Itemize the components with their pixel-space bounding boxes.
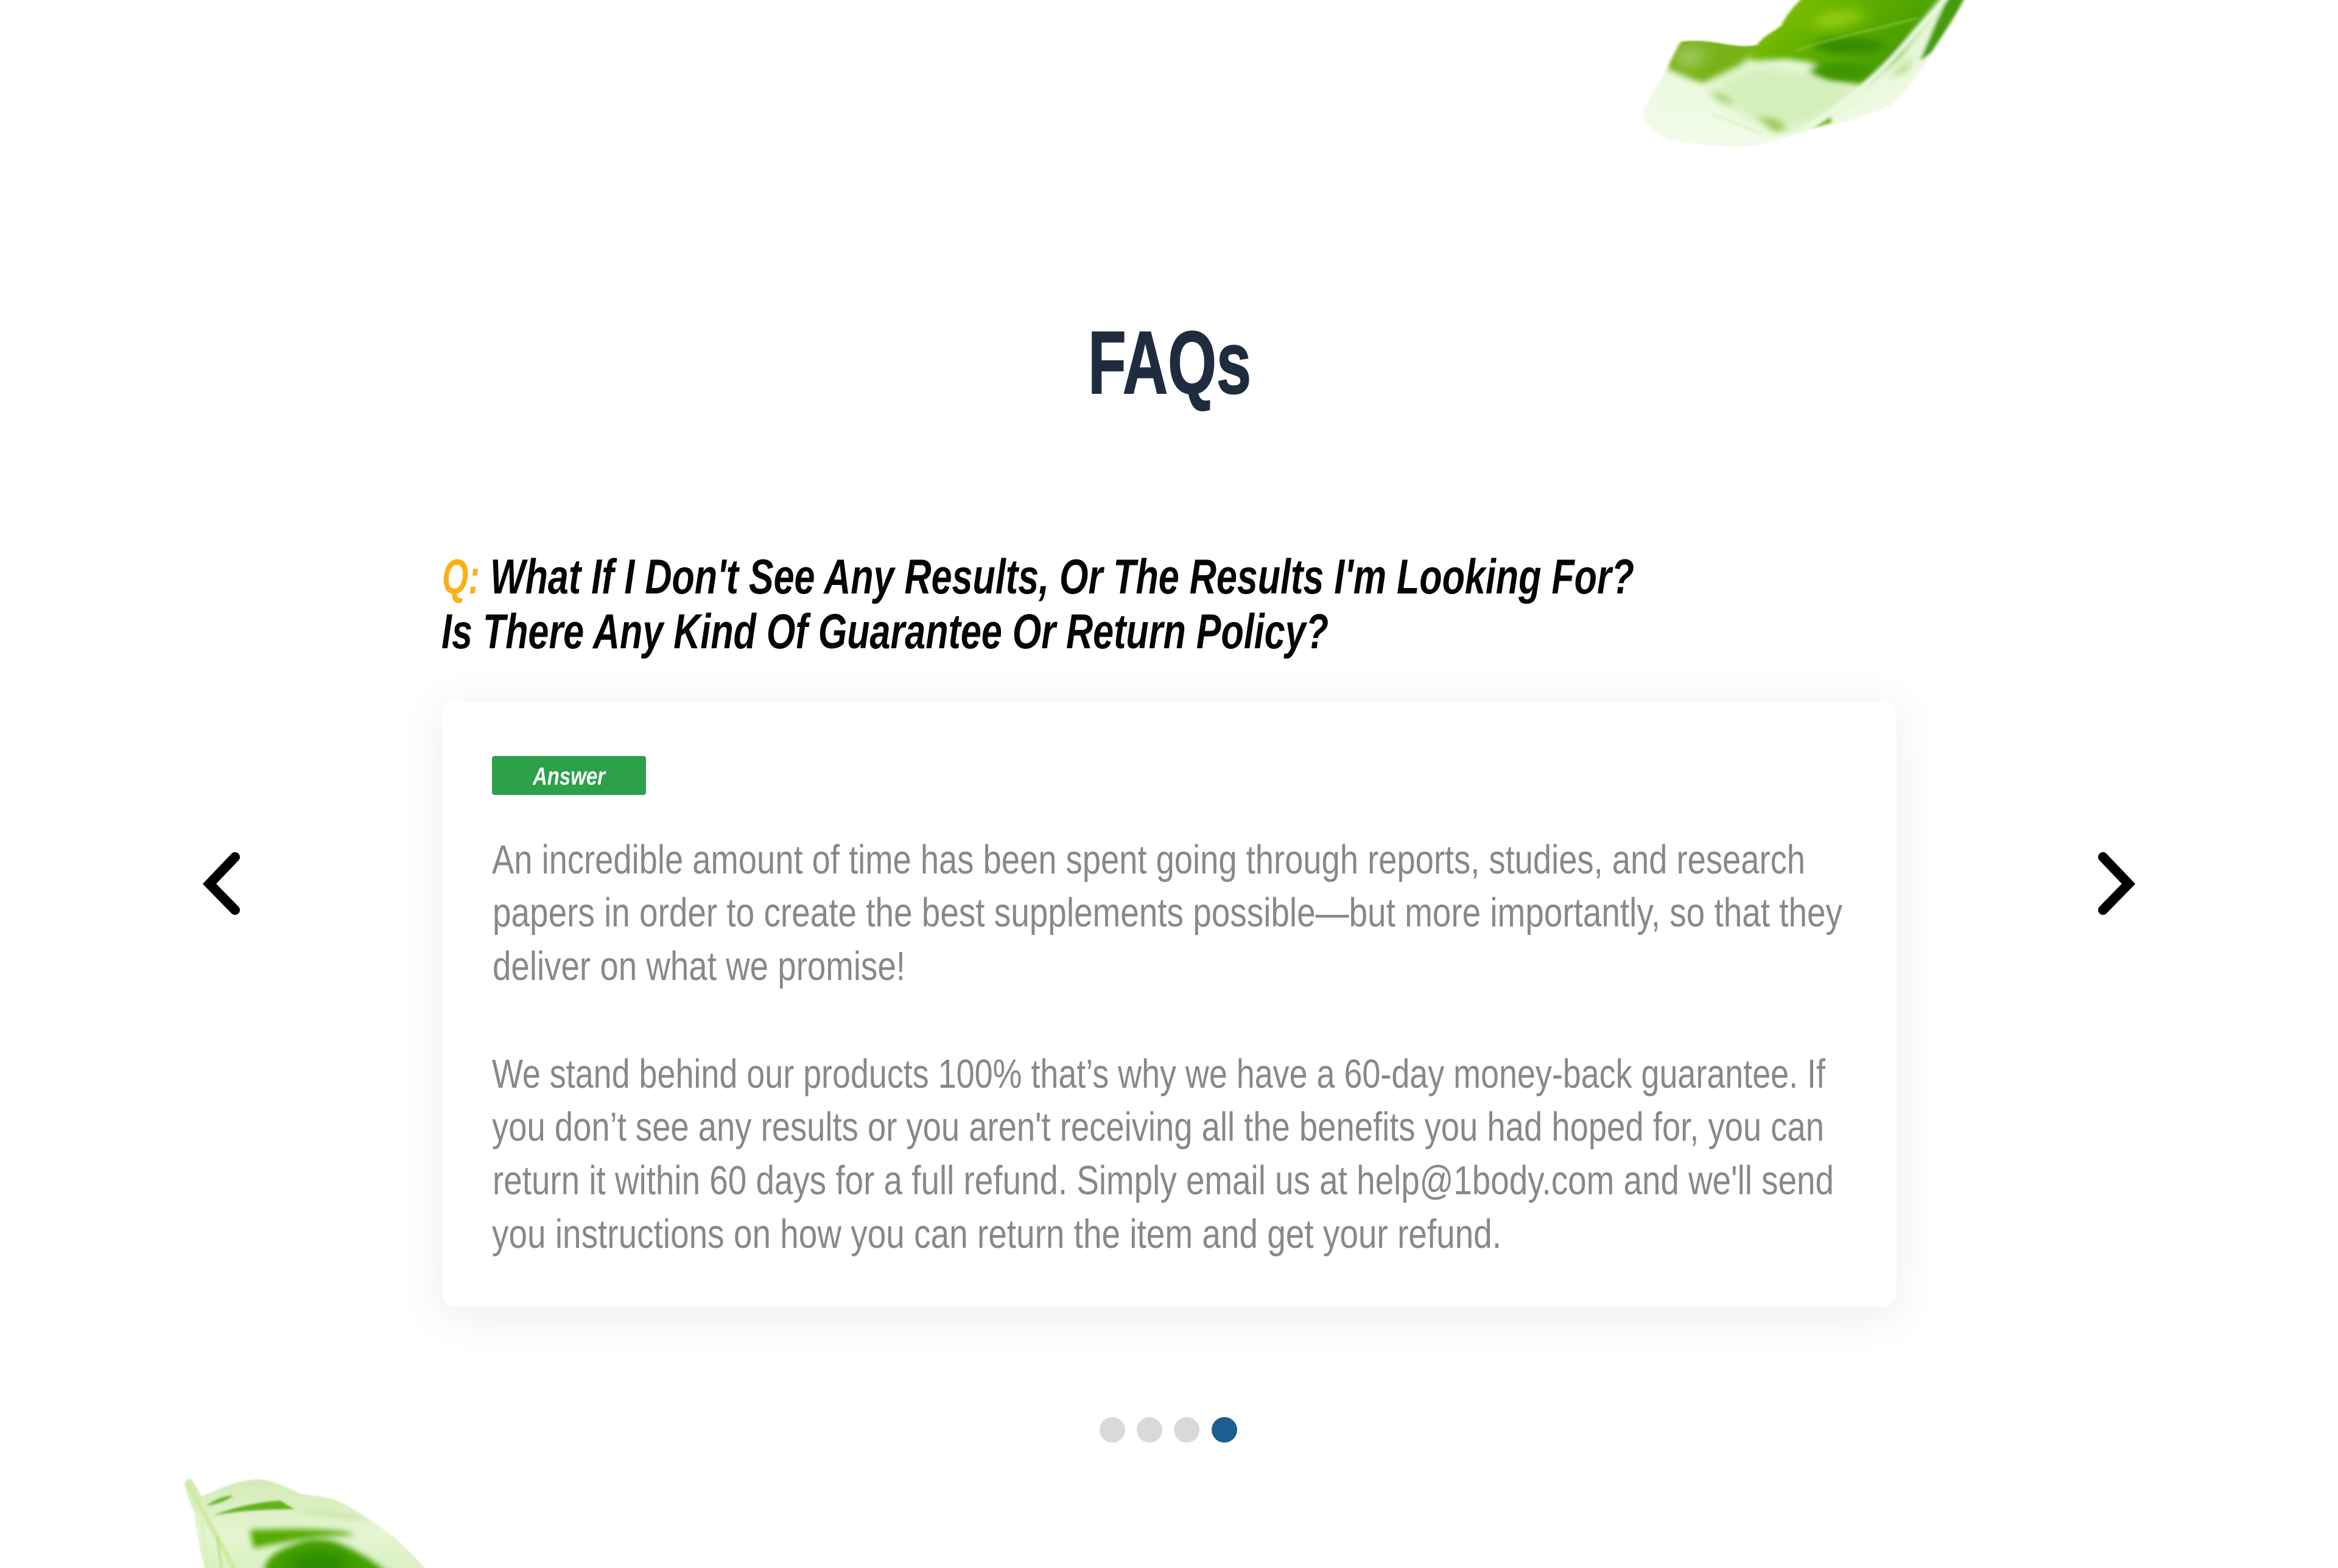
text block: first answer paragraph: deliver on what we promise! [493,943,905,989]
panel: answer card [442,701,1897,1307]
question marker: Q: [442,550,480,604]
question line two: Is There Any Kind Of Guarantee Or Return Policy? [441,604,1329,659]
text block: second answer paragraph [492,1051,1834,1257]
question line one: What If I Don't See Any Results, Or The Results I'm Looking For? [490,550,1634,604]
text block: second answer paragraph: return it within 60 days for a full refund. Simply email us at help@1body.com and we'll send [493,1158,1834,1203]
arrow: previous [209,857,235,910]
text block: first answer paragraph: papers in order to create the best supplements possible—but more importantly, so that they [493,890,1842,936]
badge: Answer [492,756,646,795]
text block: first answer paragraph: An incredible amount of time has been spent going through reports, studies, and research [492,837,1805,883]
image: basil leaf bottom left [181,1475,428,1568]
badge: Answer: Answer [532,762,606,790]
text block: second answer paragraph: you don’t see any results or you aren't receiving all the benefits you had hoped for, you can [492,1104,1824,1150]
text block: first answer paragraph [492,837,1842,989]
text block: second answer paragraph: you instructions on how you can return the item and get your refund. [492,1211,1501,1257]
title: FAQs: FAQs [1088,313,1251,412]
text block: second answer paragraph: We stand behind our products 100% that’s why we have a 60-day money-back guarantee. If [492,1051,1825,1097]
question heading [441,550,1634,659]
arrow: next [2103,857,2129,910]
image: basil leaf top right [1637,0,1969,150]
pagination dots [1100,1417,1237,1443]
